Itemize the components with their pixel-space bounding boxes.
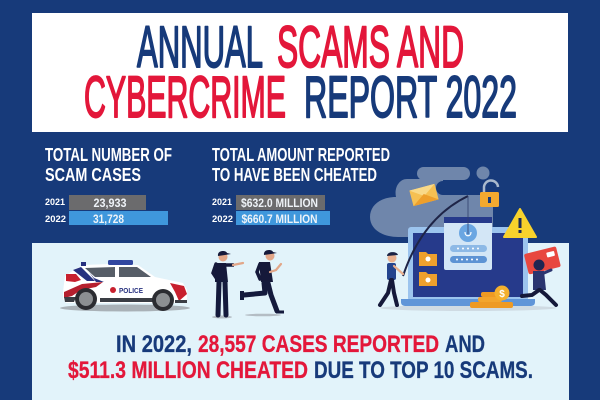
title panel [32,13,568,132]
heading: total number of scam cases [45,145,172,185]
panel: total number of scam cases [45,145,172,226]
bar: 2021 amount: 2021 [212,197,233,208]
front wheel [152,289,174,311]
heading: total amount reported to have been cheated [212,145,390,185]
icon: folder 2 [419,272,437,286]
bar: 2022 cases [45,211,168,226]
fishing rod [403,196,468,276]
police light bar [108,260,133,265]
laptop body [408,227,528,301]
car red and blue stripes [66,274,81,282]
bar: 2022 amount [212,211,330,226]
login card [444,217,492,270]
car lower trim [64,297,187,303]
illustration: laptop with phishing card [380,217,556,311]
laptop shadow [380,305,556,311]
car windows [85,267,151,277]
title line 1: ANNUAL [137,15,263,80]
panel: light blue lower section [32,243,569,400]
icon: warning triangle [504,209,536,237]
summary text [68,331,533,384]
car shadow [60,304,190,312]
icon: cloud [370,166,493,237]
icon: envelope [409,184,439,206]
fisherman body [387,263,396,280]
icon: coins [470,286,513,308]
panel: total amount cheated [212,145,390,226]
car body [63,264,187,303]
illustration: police car [60,260,190,312]
summary line 2: $511.3 MILLION CHEATED [68,357,308,384]
police officer pointing [212,251,243,318]
heading: total amount reported to have been cheated: TO HAVE BEEN CHEATED [212,165,377,185]
laptop screen [413,233,523,297]
fisherman head [388,254,396,262]
fisherman with rod [380,196,471,305]
police officer running [242,250,284,316]
heading: total amount reported to have been cheated: TOTAL AMOUNT REPORTED [212,145,390,165]
bar: 2022 cases: 2022 [45,214,66,225]
title line 2: CYBERCRIME [84,65,286,130]
bar: 2021 amount: $632.0 MILLION [241,196,318,210]
summary line 2 [68,357,533,384]
bar: 2021 amount [212,195,325,210]
laptop base [401,299,535,306]
bar: 2022 amount: 2022 [212,214,233,225]
thief running with card [522,260,556,305]
bar: 2021 cases: 2021 [45,197,66,208]
bar: 2022 amount: $660.7 MILLION [242,212,318,226]
heading: total number of scam cases: SCAM CASES [45,165,141,185]
summary line 2: DUE TO TOP 10 SCAMS. [314,357,533,384]
icon: red credit card [524,246,561,275]
bar: 2022 cases: 31,728 [93,212,124,226]
rear wheel [75,288,97,310]
icon: open padlock [480,180,499,207]
icon: coins: $ [499,289,505,300]
icon: folder 1 [419,252,437,266]
summary line 1: AND [445,331,485,358]
bar: 2021 cases [45,195,146,210]
police label: POLICE [119,286,143,295]
heading: total number of scam cases: TOTAL NUMBER OF [45,145,172,165]
summary line 1: IN 2022, [116,331,192,358]
summary line 1: 28,557 CASES REPORTED [198,331,439,358]
bar: 2021 cases: 23,933 [94,196,127,210]
